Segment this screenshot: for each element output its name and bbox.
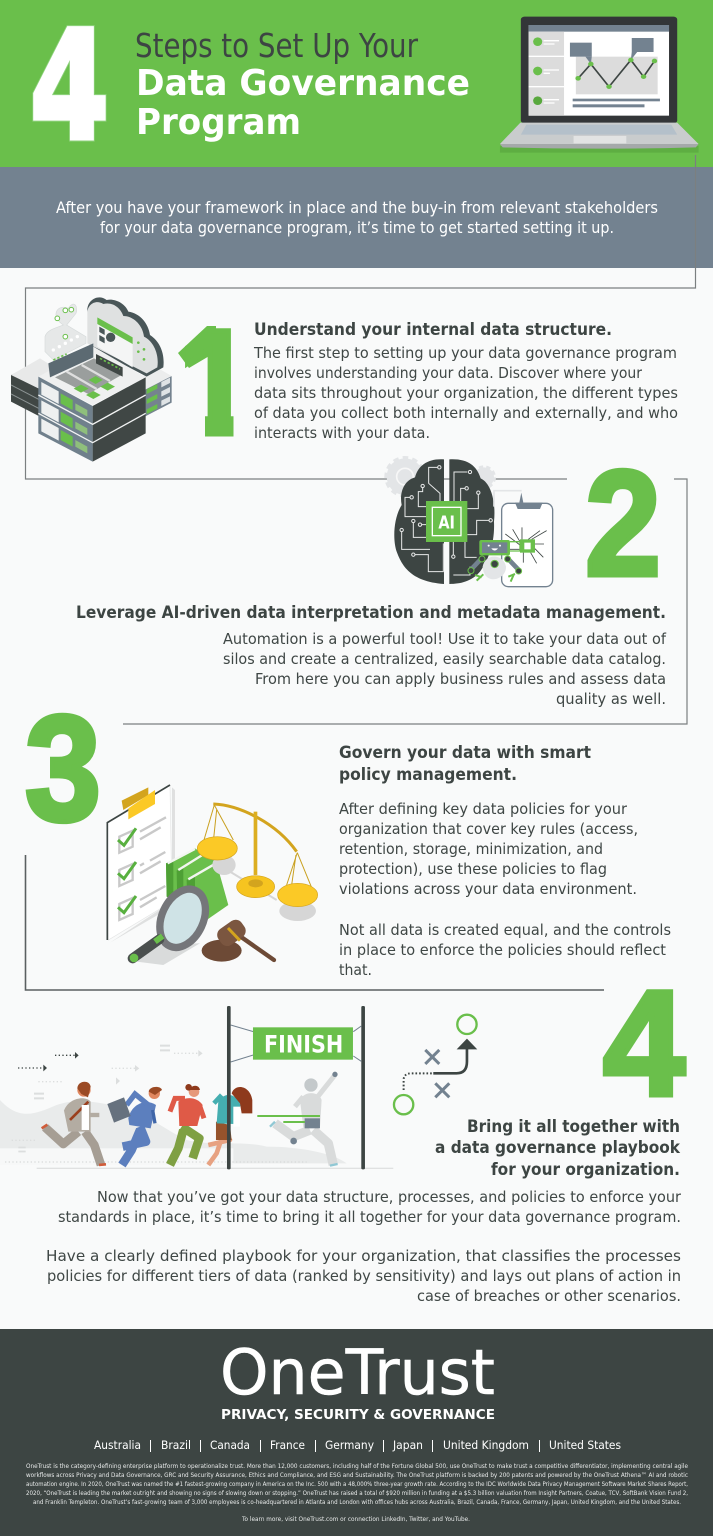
robot <box>483 557 506 579</box>
country list: France <box>270 1438 305 1452</box>
data cloud outline <box>45 304 86 360</box>
illustration: runners and robot at finish line <box>0 1006 477 1169</box>
country list: United Kingdom <box>443 1438 529 1452</box>
step 4 text: Now that you’ve got your data structure, processes, and policies to enforce your <box>97 1188 682 1206</box>
server faces <box>41 382 87 453</box>
back stacks <box>11 362 40 417</box>
step 1 text: data sits throughout your organization, the different types <box>254 384 678 402</box>
books <box>166 848 228 920</box>
title: Program <box>136 102 301 143</box>
step 4 text: case of breaches or other scenarios. <box>417 1287 681 1305</box>
logo wordmark: OneTrust <box>220 1336 495 1409</box>
country list <box>94 1438 621 1452</box>
finish tape <box>257 1116 320 1122</box>
footer <box>0 1329 713 1536</box>
intro band <box>0 167 713 268</box>
magnifier <box>137 943 200 965</box>
icon: server stack with cloud <box>11 297 172 462</box>
step 2 text: quality as well. <box>556 690 666 708</box>
step 2 text: From here you can apply business rules and assess data <box>255 670 666 688</box>
step 4 text: Bring it all together with <box>467 1117 680 1137</box>
connector line steps 3 to 4 <box>26 855 604 990</box>
runner 3 <box>170 1084 204 1165</box>
speed dashes <box>5 1053 307 1162</box>
tagline: PRIVACY, SECURITY & GOVERNANCE <box>221 1408 495 1423</box>
number 1: 1 <box>178 298 254 466</box>
number 1 <box>178 326 234 436</box>
number 4: 4 <box>603 959 685 1127</box>
step 4 text <box>46 1117 682 1305</box>
connector line steps 1 to 2 <box>26 155 696 724</box>
big number 4: 4 <box>30 0 109 174</box>
robot runner <box>270 1072 338 1166</box>
header banner <box>0 0 713 174</box>
intro text <box>56 198 658 237</box>
step 4 text: policies for different tiers of data (ranked by sensitivity) and lays out plans of action in <box>47 1267 681 1285</box>
country list: Germany <box>325 1438 374 1452</box>
step 4 text: standards in place, it’s time to bring it all together for your data governance program. <box>58 1208 681 1226</box>
company description: workflows across Privacy and Data Governance, GRC and Security Assurance, Ethics and Compliance, and ESG and Sustainability. The OneTrust platform is backed by 200 patents and powered by the OneTrust Athena™ AI and robotic <box>26 1472 688 1479</box>
step 3 text: After defining key data policies for your <box>339 800 628 818</box>
big number 4: 4 <box>30 0 109 174</box>
company description <box>26 1463 688 1523</box>
step 3 text: in place to enforce the policies should reflect <box>339 941 666 959</box>
step 1 text: involves understanding your data. Discover where your <box>254 364 643 382</box>
clipboard <box>110 787 175 943</box>
intro text: for your data governance program, it’s time to get started setting it up. <box>100 218 614 237</box>
main stack <box>38 347 146 405</box>
step 2 text: Leverage AI-driven data interpretation and metadata management. <box>76 603 666 623</box>
finish banner: FINISH <box>264 1030 343 1058</box>
background hills <box>0 1100 347 1163</box>
step 1 text <box>253 320 678 442</box>
step 3 text: organization that cover key rules (access, <box>339 820 638 838</box>
runner 1 <box>42 1082 106 1165</box>
title: Data Governance <box>136 63 470 104</box>
step 3 text: Govern your data with smart <box>339 743 591 763</box>
icon: checklist, books, scales, magnifier, gavel <box>107 785 318 965</box>
gavel <box>202 940 242 962</box>
step 1 text: The first step to setting up your data governance program <box>253 344 677 362</box>
step 3 text: violations across your data environment. <box>339 880 637 898</box>
company description: To learn more, visit OneTrust.com or connection LinkedIn, Twitter, and YouTube. <box>241 1516 470 1523</box>
AI chip <box>426 501 467 542</box>
step 3 text: protection), use these policies to flag <box>339 860 607 878</box>
number 2: 2 <box>585 439 661 607</box>
step 3 text: that. <box>339 961 372 979</box>
number 3: 3 <box>25 684 101 852</box>
title <box>135 26 470 143</box>
country list: Japan <box>392 1438 423 1452</box>
step 1 text: Understand your internal data structure. <box>254 320 612 340</box>
step 2 text: Automation is a powerful tool! Use it to take your data out of <box>223 630 666 648</box>
title: Steps to Set Up Your <box>135 26 418 65</box>
country list: Brazil <box>161 1438 191 1452</box>
step 4 text: a data governance playbook <box>435 1138 681 1158</box>
gears <box>387 458 423 495</box>
finish posts <box>227 1006 231 1169</box>
runner 4 <box>208 1087 252 1165</box>
step 3 text: policy management. <box>339 765 517 785</box>
step 1 text: interacts with your data. <box>254 424 430 442</box>
cloud <box>87 297 164 377</box>
step 3 text <box>339 743 671 979</box>
phone <box>502 503 553 587</box>
intro text: After you have your framework in place and the buy-in from relevant stakeholders <box>56 198 658 217</box>
runner 2 <box>107 1087 162 1165</box>
icon: AI brain and robot with phone <box>387 458 553 587</box>
step 3 text: Not all data is created equal, and the controls <box>339 921 671 939</box>
country list: Australia <box>94 1438 141 1452</box>
icon: playbook diagram <box>394 1015 477 1114</box>
brain <box>394 459 444 584</box>
step 4 text: Have a clearly defined playbook for your organization, that classifies the processes <box>46 1247 681 1265</box>
step 1 text: of data you collect both internally and externally, and who <box>254 404 678 422</box>
step 4 text: for your organization. <box>491 1160 680 1180</box>
icon: laptop with dashboard <box>500 17 699 153</box>
AI chip: AI <box>438 513 455 534</box>
step 2 text: silos and create a centralized, easily searchable data catalog. <box>223 650 666 668</box>
country list: United States <box>549 1438 621 1452</box>
step 3 text: retention, storage, minimization, and <box>339 840 603 858</box>
step 2 text <box>76 603 666 708</box>
company description: OneTrust is the category-defining enterprise platform to operationalize trust. More than 12,000 customers, including half of the Fortune Global 500, use OneTrust to make trust a competitive differentiator, implementing central agile <box>26 1463 688 1470</box>
country list: Canada <box>210 1438 250 1452</box>
scales <box>212 855 236 875</box>
ground line <box>37 1168 393 1169</box>
